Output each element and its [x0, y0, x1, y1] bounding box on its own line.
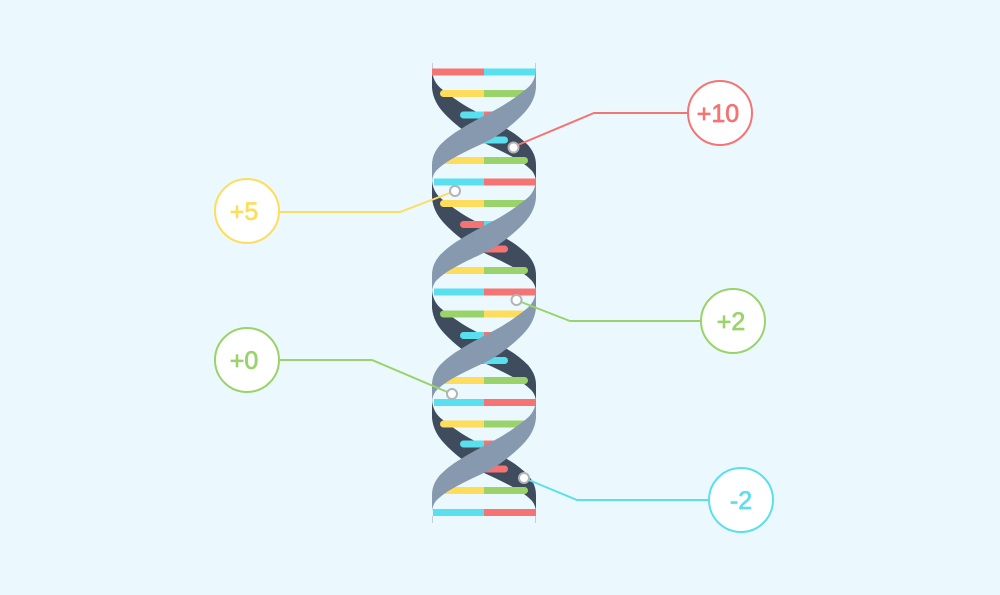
callout: -2: -2 [730, 487, 752, 515]
helix: dark strand [432, 68, 536, 512]
callout: +10: +10 [697, 100, 739, 128]
callout: +5: +5 [230, 198, 258, 226]
callout: +2: +2 [717, 308, 745, 336]
callout: +0 [215, 328, 457, 399]
helix: base pair rungs [432, 68, 536, 516]
helix: end stubs [432, 63, 536, 523]
callout: +10 [508, 81, 752, 152]
callout: +2 [512, 289, 765, 353]
callout: +5 [215, 179, 460, 243]
callout: -2 [519, 468, 773, 532]
callout: +0: +0 [230, 347, 258, 375]
helix: light strand [432, 68, 536, 512]
